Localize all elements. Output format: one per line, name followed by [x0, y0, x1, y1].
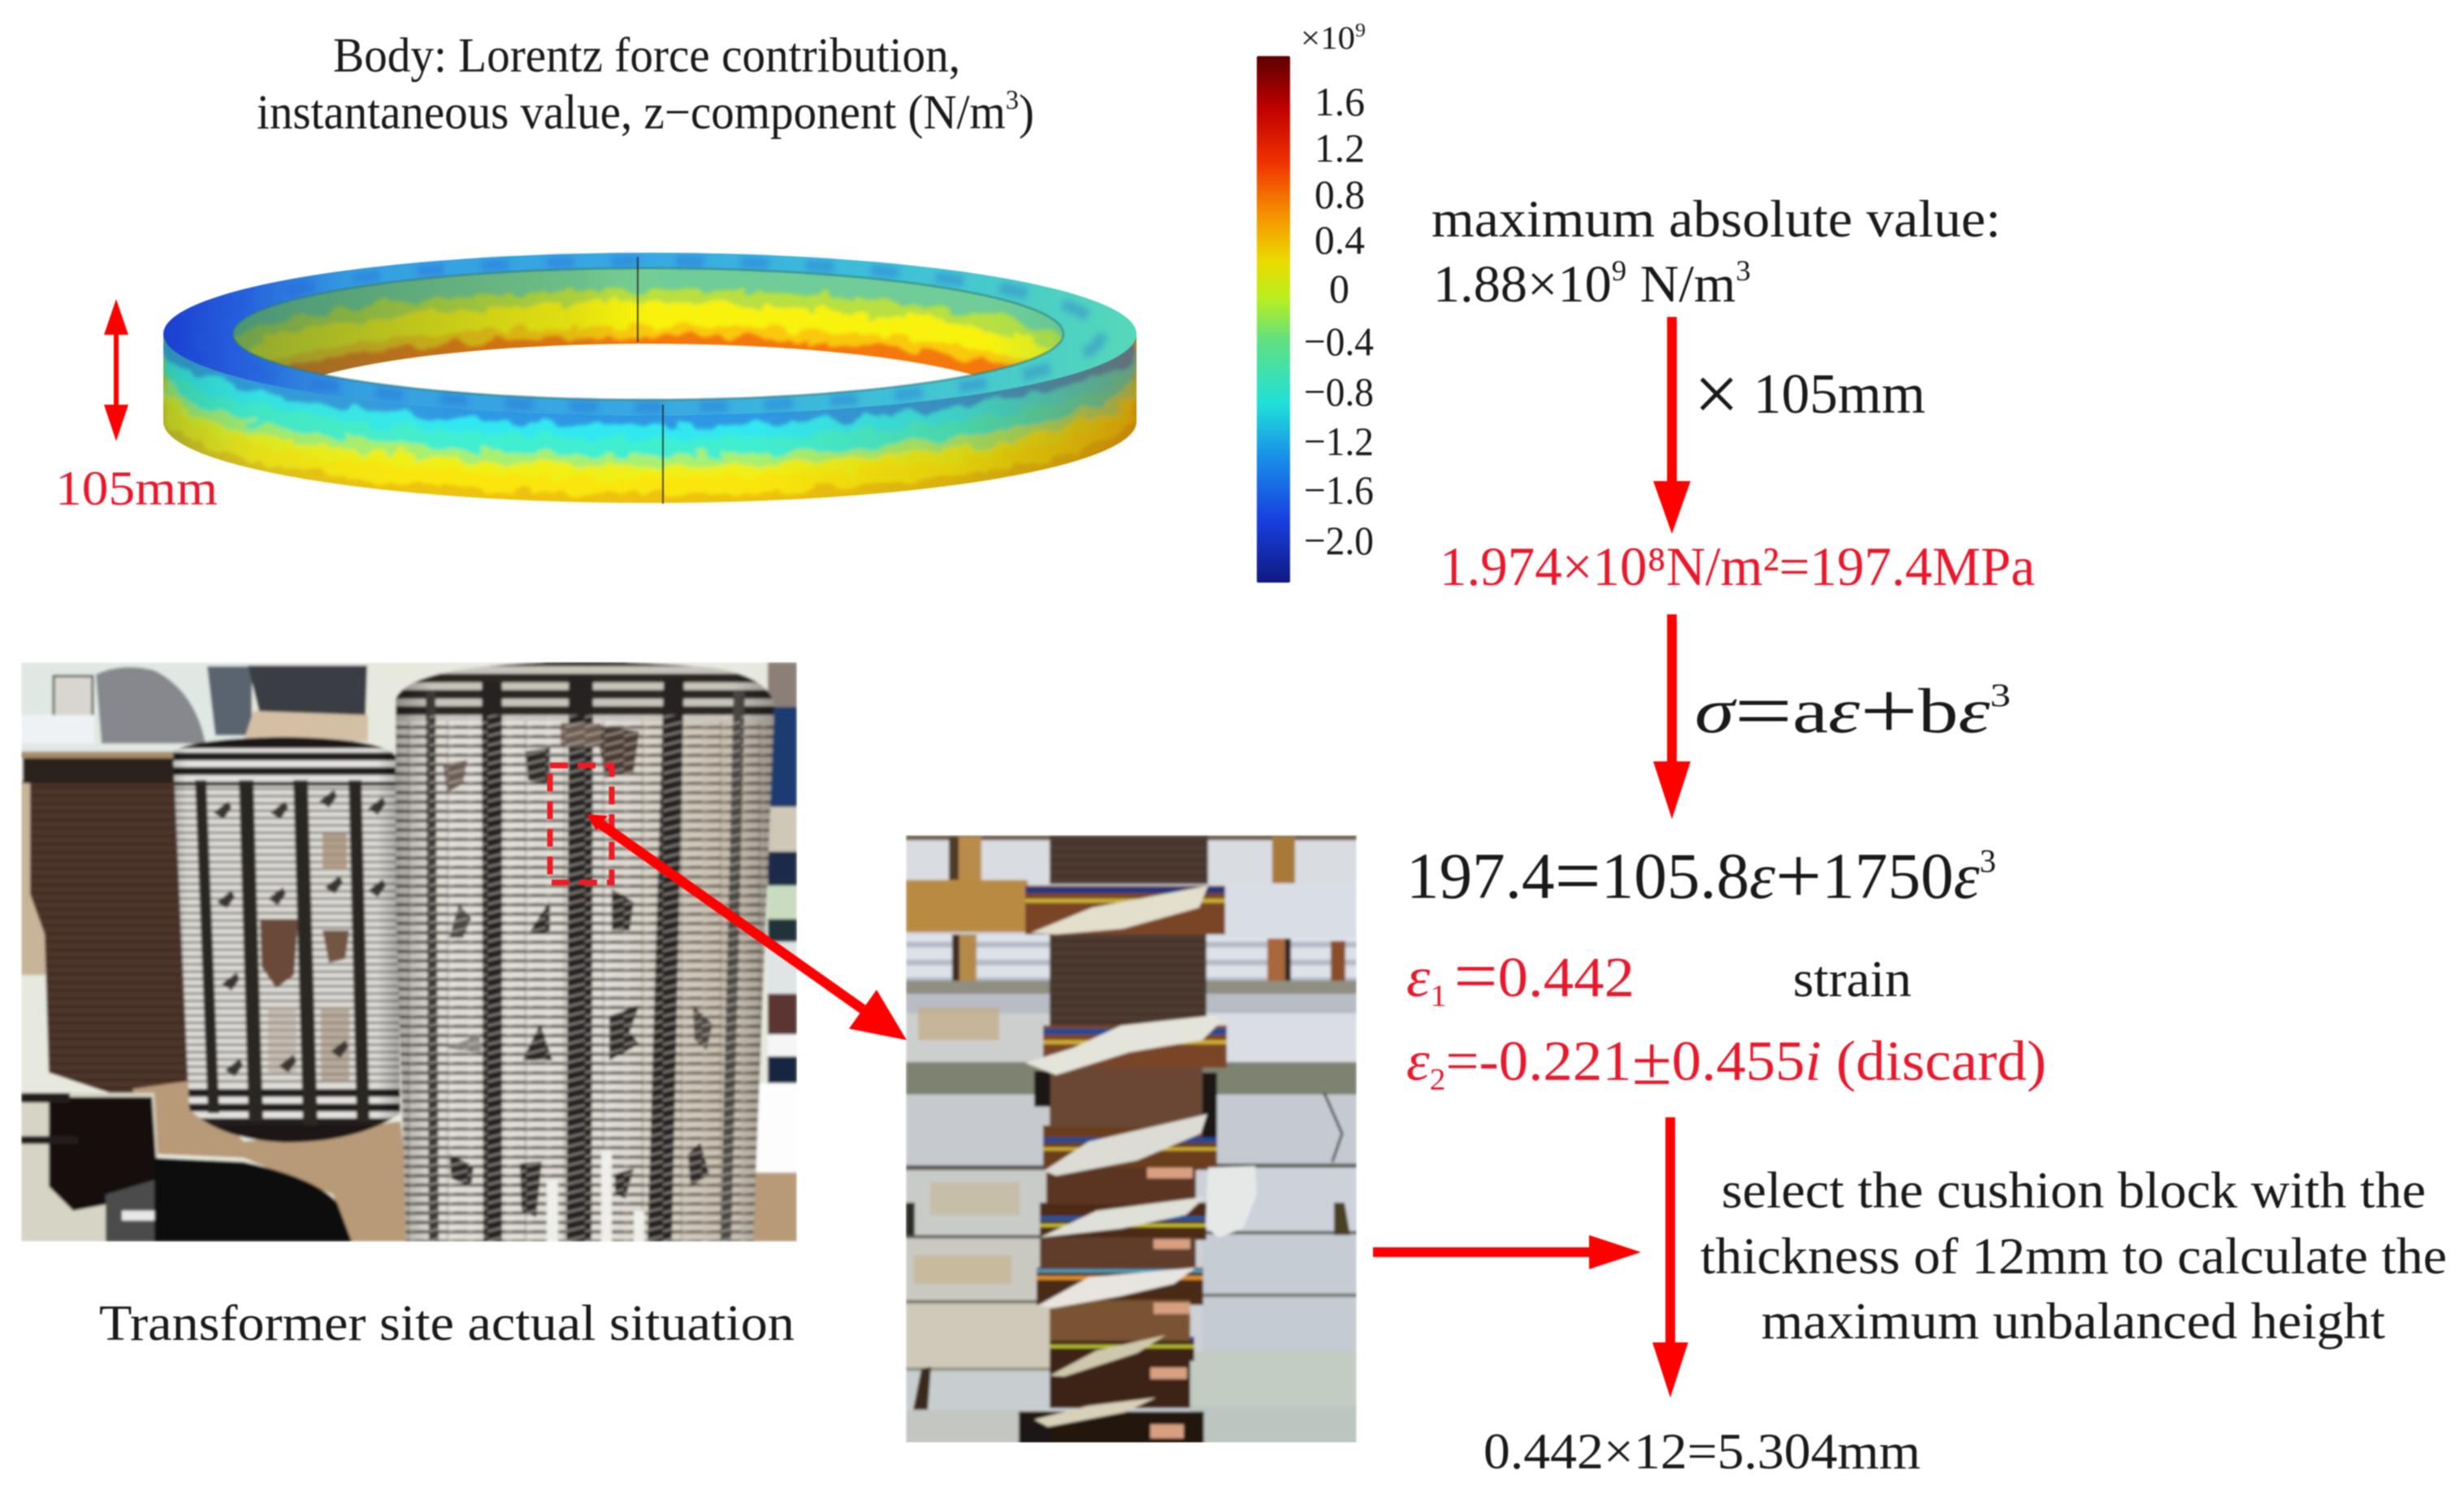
tan block	[906, 880, 1028, 932]
photo: cushion block close-up	[906, 835, 1357, 1445]
upper right white block	[1210, 883, 1357, 937]
background beams	[906, 835, 1357, 985]
root one: ε	[1406, 947, 1431, 1009]
brown highlights	[1147, 1168, 1193, 1438]
ring: top face	[163, 253, 1137, 415]
label: times 105mm: ×	[1694, 349, 1739, 439]
colour bar tick labels: −0.8	[1304, 369, 1374, 414]
floor	[132, 1081, 414, 1242]
formula: stress strain relation: +	[1860, 665, 1918, 756]
result: unbalanced height: 0.442×12=5.304mm	[1483, 1424, 1921, 1480]
colour bar	[1257, 20, 1374, 583]
dashed selection box	[550, 765, 612, 882]
middle coil	[162, 731, 406, 1146]
root two discarded: ±	[1632, 1021, 1672, 1099]
ring: central hole	[323, 343, 973, 401]
formula: substituted equation: 3	[1980, 843, 1996, 879]
title: Lorentz force contribution: 3	[1006, 85, 1019, 115]
label: strain: strain	[1793, 950, 1912, 1008]
bottom-left equipment	[20, 1090, 159, 1242]
caption: site situation: Transformer site actual situation	[99, 1296, 795, 1351]
root one: 1	[1430, 979, 1447, 1013]
text: cushion block selection: thickness of 12mm to calculate the	[1700, 1227, 2447, 1285]
ring: seam lines	[638, 257, 663, 504]
arrow: site to close-up	[587, 814, 907, 1040]
arrow: final calculation	[1652, 1117, 1688, 1398]
root two discarded: i (discard)	[1805, 1030, 2037, 1093]
formula: stress strain relation: σ	[1695, 675, 1737, 746]
root one: 0.442	[1498, 947, 1635, 1009]
colour bar tick labels: ×10	[1301, 20, 1352, 56]
label: times 105mm: 105mm	[1739, 363, 1925, 426]
colour bar tick labels: −1.2	[1304, 418, 1374, 464]
text: maximum absolute value	[1431, 190, 2001, 314]
ring: outer wall	[162, 336, 1137, 504]
title: Lorentz force contribution	[257, 28, 1034, 139]
root two discarded: 0.455	[1672, 1030, 1805, 1093]
brown spacer strips	[1019, 886, 1227, 1445]
formula: stress strain relation: 3	[1990, 677, 2011, 713]
formula: substituted equation: ε	[1749, 841, 1776, 913]
formula: stress strain relation: b	[1918, 675, 1959, 746]
hood and cone	[207, 665, 368, 741]
text: maximum absolute value: maximum absolute value:	[1431, 190, 2001, 249]
formula: substituted equation: 1750	[1821, 841, 1954, 913]
root two discarded: 2	[1430, 1063, 1445, 1097]
right background strip	[751, 662, 797, 1242]
colour bar tick labels: 0.8	[1314, 171, 1365, 217]
white ribbons	[1025, 886, 1257, 1427]
grey bands	[906, 981, 1357, 1445]
colour bar tick labels: 0.4	[1314, 217, 1365, 262]
formula: substituted equation: 105.8	[1601, 841, 1749, 913]
corrugated blocks	[1040, 835, 1208, 1408]
text: maximum absolute value: 1.88×10	[1433, 255, 1608, 314]
title: Lorentz force contribution: )	[1019, 85, 1034, 139]
label: 105mm: 105mm	[55, 462, 218, 515]
text: cushion block selection	[1700, 1161, 2447, 1350]
formula: stress strain relation: ε	[1959, 675, 1990, 746]
root two discarded: =-0.221	[1445, 1030, 1632, 1093]
colour bar tick labels: −2.0	[1304, 518, 1374, 563]
arrow: from photo to formula	[1373, 1235, 1641, 1269]
colour bar tick labels: 9	[1355, 20, 1366, 41]
title: Lorentz force contribution: instantaneous value, z−component (N/m	[257, 85, 1045, 139]
ring: inner wall	[232, 267, 1064, 375]
3D ring force distribution	[162, 252, 1137, 505]
formula: stress strain relation: a	[1792, 675, 1828, 746]
root two discarded: ε	[1406, 1030, 1430, 1093]
text: maximum absolute value: N/m	[1626, 255, 1736, 314]
text: cushion block selection: maximum unbalanced height	[1761, 1292, 2385, 1350]
formula: substituted equation: 197.4	[1406, 841, 1552, 913]
colour bar tick labels: −1.6	[1304, 467, 1374, 513]
colour bar tick labels	[1301, 20, 1374, 563]
colour bar tick labels: 0	[1329, 266, 1349, 311]
arrow: multiply step	[1653, 317, 1691, 534]
text: cushion block selection: select the cushion block with the	[1721, 1161, 2426, 1219]
dark block edges	[1019, 1071, 1217, 1445]
dark arch	[154, 1158, 352, 1242]
formula: substituted equation: ε	[1954, 841, 1980, 913]
right coil	[394, 658, 780, 1243]
height dimension arrow	[104, 299, 128, 441]
formula: substituted equation: +	[1775, 830, 1821, 921]
fan	[96, 667, 206, 744]
colour lines	[1025, 887, 1227, 1348]
colour bar tick labels: 1.6	[1314, 79, 1365, 124]
title: Lorentz force contribution: Body: Lorentz force contribution,	[333, 28, 960, 82]
result: pressure value: 1.974×10⁸N/m²=197.4MPa	[1440, 535, 2035, 597]
colour bar tick labels: −0.4	[1304, 319, 1374, 364]
left brown coil	[21, 752, 188, 1097]
text: maximum absolute value: 9	[1612, 254, 1626, 287]
formula: substituted equation: =	[1555, 830, 1601, 921]
root one: =	[1453, 936, 1498, 1017]
photo: transformer site	[21, 658, 797, 1243]
formula: stress strain relation: ε	[1828, 675, 1860, 746]
text: maximum absolute value: 3	[1736, 254, 1751, 287]
arrow: stress strain step	[1653, 614, 1691, 819]
formula: stress strain relation: =	[1734, 665, 1792, 756]
colour bar tick labels: 1.2	[1314, 125, 1365, 171]
